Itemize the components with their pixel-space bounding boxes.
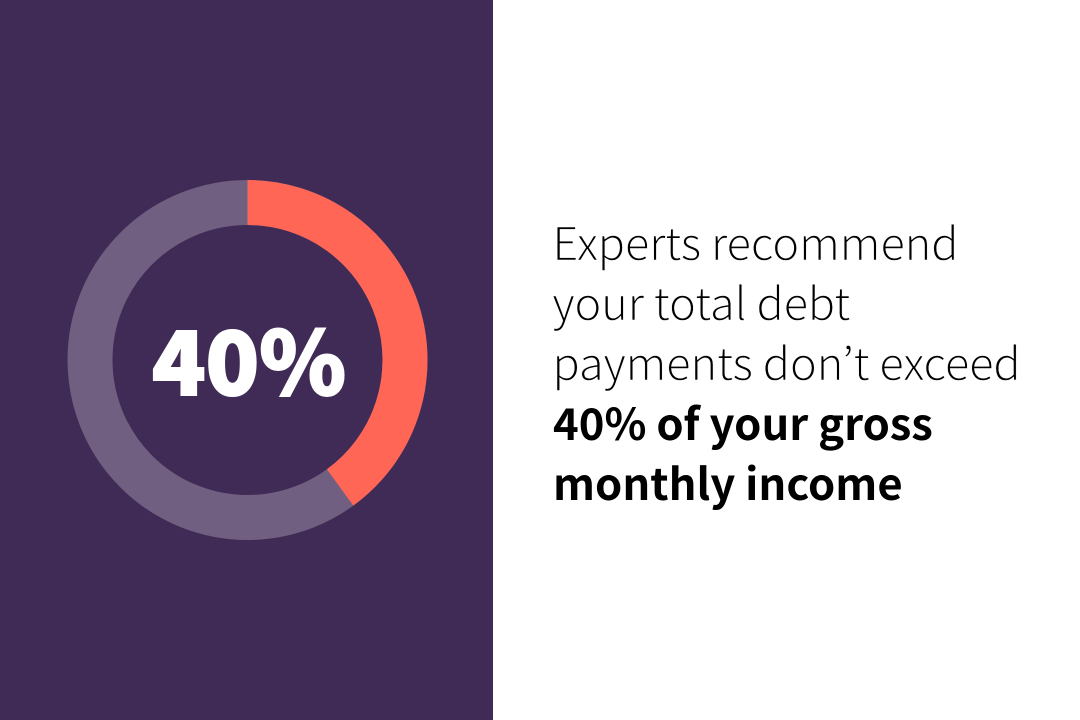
text block: recommendation: payments don’t exceed xyxy=(552,328,1021,393)
text block: recommendation: monthly income xyxy=(553,449,903,513)
text block: recommendation: Experts recommend xyxy=(552,208,959,273)
text block: recommendation: your total debt xyxy=(552,268,850,333)
donut segment: 40% xyxy=(248,202,405,487)
text block: recommendation xyxy=(552,208,1021,513)
donut centre value: 40% xyxy=(152,294,346,421)
donut chart: 40 percent xyxy=(68,180,428,540)
donut track xyxy=(90,202,405,518)
text block: recommendation: 40% of your gross xyxy=(553,389,933,453)
panel: purple background xyxy=(0,0,493,720)
